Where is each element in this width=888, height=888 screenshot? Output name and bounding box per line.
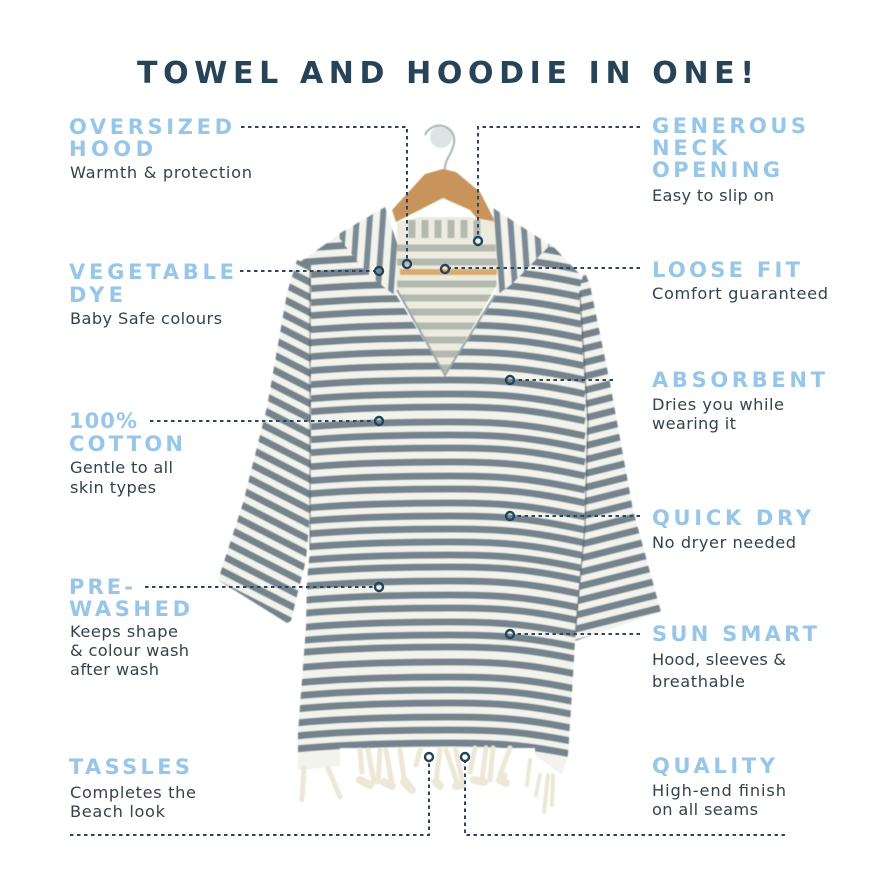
callout: tassles: TASSLES: [69, 755, 190, 779]
callout: loose fit: Comfort guaranteed: [652, 284, 828, 303]
callout: sun smart: [506, 622, 818, 691]
callout: sun smart: Hood, sleeves &: [652, 650, 786, 669]
callout: generous neck opening: [474, 114, 806, 245]
callout: vegetable dye: Baby Safe colours: [70, 309, 222, 328]
callout: absorbent: [506, 368, 826, 433]
callout: vegetable dye: [69, 260, 383, 328]
callout: pre-washed: after wash: [70, 660, 159, 679]
callout: sun smart: SUN SMART: [652, 622, 818, 646]
callout: quick dry: No dryer needed: [652, 533, 796, 552]
callout: quality: High-end finish: [652, 781, 786, 800]
callout: oversized hood: Warmth & protection: [70, 163, 252, 182]
title: TOWEL AND HOODIE IN ONE!: [137, 56, 754, 91]
icon: wall hook: [425, 125, 454, 170]
callout: oversized hood: HOOD: [69, 137, 153, 161]
callout: sun smart: breathable: [652, 672, 745, 691]
hood: right panel: [493, 208, 550, 296]
callout: oversized hood: OVERSIZED: [69, 115, 232, 139]
callout: quality: QUALITY: [652, 754, 776, 778]
left sleeve: [218, 260, 311, 623]
garment photo: striped hoodie on hanger: [218, 125, 661, 812]
callout: vegetable dye: DYE: [69, 283, 123, 307]
callout: quality: [461, 753, 786, 835]
wooden hanger: [392, 169, 497, 232]
callout: 100% cotton: [69, 409, 383, 497]
callout: quick dry: [506, 506, 812, 552]
callout: loose fit: [441, 258, 828, 303]
callout: 100% cotton: 100%: [69, 409, 137, 433]
callout: quality: on all seams: [652, 800, 758, 819]
callout: pre-washed: PRE-: [69, 575, 133, 599]
callout: quick dry: QUICK DRY: [652, 506, 812, 530]
callout: tassles: Beach look: [70, 802, 166, 821]
callout: generous neck opening: GENEROUS: [652, 114, 806, 138]
callout: 100% cotton: Gentle to all: [70, 458, 173, 477]
callout: tassles: Completes the: [70, 783, 196, 802]
callout: tassles: [69, 753, 433, 835]
callout: oversized hood: [69, 115, 411, 268]
callout: absorbent: ABSORBENT: [652, 368, 826, 392]
callout: pre-washed: Keeps shape: [70, 622, 178, 641]
callout: generous neck opening: OPENING: [652, 158, 780, 182]
callout: generous neck opening: Easy to slip on: [652, 186, 774, 205]
callout: absorbent: Dries you while: [652, 395, 784, 414]
callout: vegetable dye: VEGETABLE: [69, 260, 234, 284]
callout: absorbent: wearing it: [652, 414, 736, 433]
callout: 100% cotton: skin types: [70, 478, 156, 497]
hood lining: [397, 217, 497, 375]
callout: generous neck opening: NECK: [652, 136, 728, 160]
callout: pre-washed: & colour wash: [70, 641, 189, 660]
hood: left panel: [337, 207, 397, 294]
callout: loose fit: LOOSE FIT: [652, 258, 801, 282]
garment body stripes: [290, 230, 600, 790]
neckline edge: [397, 290, 495, 375]
callout: 100% cotton: COTTON: [69, 432, 183, 456]
callout: pre-washed: WASHED: [69, 597, 190, 621]
callout: pre-washed: [69, 575, 383, 679]
tassels: [302, 748, 553, 812]
right sleeve: [575, 270, 661, 641]
